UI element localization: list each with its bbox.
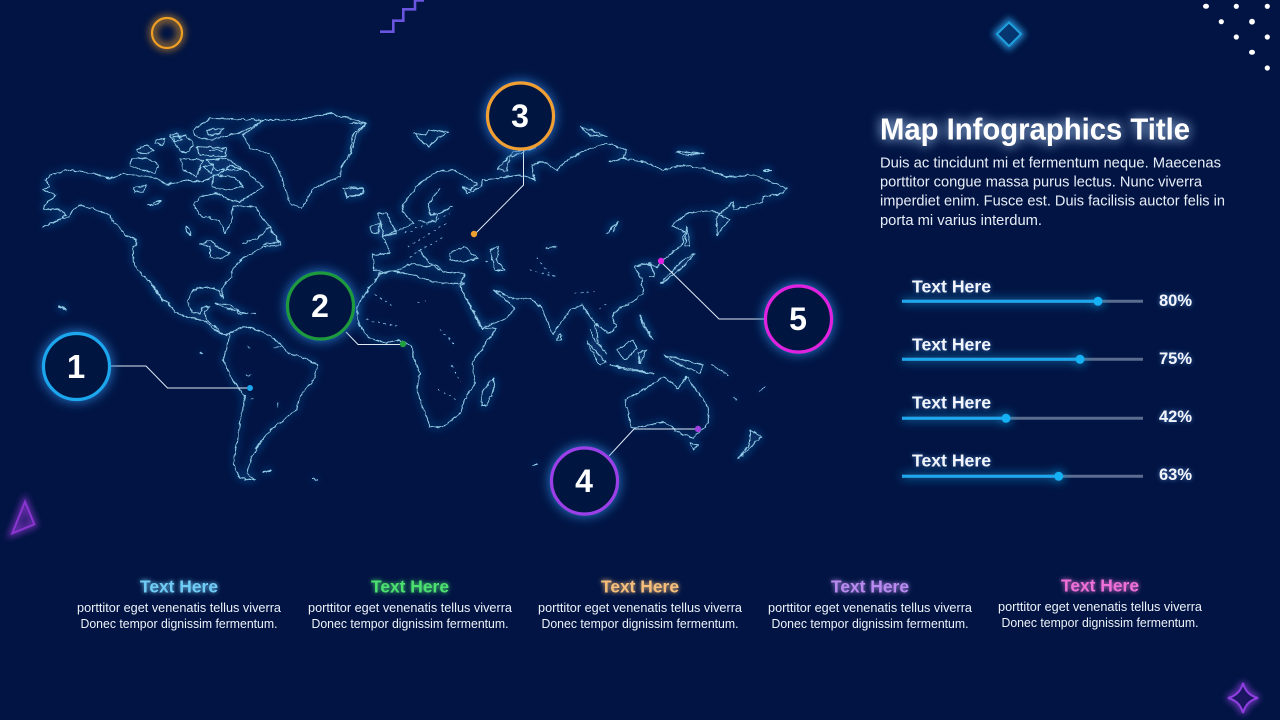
bottom column 3: Donec tempor dignissim fermentum. — [542, 617, 738, 631]
bottom column 5: Donec tempor dignissim fermentum. — [1002, 616, 1198, 630]
marker circle 1 — [44, 334, 110, 400]
progress row 4: 63%: Text Here — [912, 451, 991, 471]
bottom column 1 — [77, 577, 281, 631]
progress row 3: 42% — [902, 393, 1192, 426]
map: Africa, Eurasia and Oceania — [350, 123, 787, 465]
bottom column 2 — [308, 577, 512, 631]
marker circle 2: 2 — [311, 288, 329, 324]
callout 3: leader and marker — [471, 150, 524, 237]
marker circle 4: 4 — [575, 463, 593, 499]
progress row 2: 75% — [902, 335, 1192, 368]
progress row 1: 80%: 80% — [1159, 291, 1192, 310]
description paragraph: Duis ac tincidunt mi et fermentum neque. Maecenas — [880, 156, 1221, 172]
bottom column 2: Text Here — [371, 577, 449, 597]
progress row 1: 80%: Text Here — [912, 277, 991, 297]
marker circle 3: 3 — [511, 98, 529, 134]
bottom column 1: Text Here — [140, 577, 218, 597]
progress row 2: 75%: 75% — [1159, 349, 1192, 368]
icon: orange glowing ring — [152, 18, 182, 48]
marker circle 1: 1 — [67, 348, 85, 385]
bottom column 2: Donec tempor dignissim fermentum. — [312, 617, 508, 631]
marker circle 4 — [552, 448, 618, 514]
bottom column 1: Donec tempor dignissim fermentum. — [80, 617, 278, 631]
marker circle 3 — [488, 83, 554, 149]
bottom column 4: Donec tempor dignissim fermentum. — [772, 617, 968, 631]
description paragraph: porttitor congue massa purus lectus. Nunc viverra — [880, 174, 1203, 190]
callout 4: leader and marker — [609, 426, 701, 456]
description paragraph: imperdiet enim. Fusce est. Duis facilisis auctor felis in — [880, 194, 1225, 210]
icon: purple triangle — [12, 502, 34, 533]
bottom column 4 — [768, 577, 972, 631]
bottom column 5: porttitor eget venenatis tellus viverra — [998, 600, 1202, 614]
callout 2: leader and marker — [346, 332, 406, 347]
icon: purple stair line — [380, 0, 424, 32]
icon: purple four-point star — [1228, 683, 1258, 713]
icon: white dot pattern — [1203, 4, 1270, 71]
bottom column 5 — [998, 576, 1202, 630]
title: Map Infographics Title — [880, 112, 1190, 146]
bottom column 3: Text Here — [601, 577, 679, 597]
progress row 1: 80% — [902, 277, 1192, 310]
callout 5: leader and marker — [658, 258, 765, 319]
description paragraph — [880, 156, 1225, 229]
marker circle 2 — [288, 273, 354, 339]
progress row 3: 42%: Text Here — [912, 393, 991, 413]
progress row 3: 42%: 42% — [1159, 407, 1192, 426]
world map — [42, 113, 787, 480]
progress row 4: 63% — [902, 451, 1192, 484]
bottom column 5: Text Here — [1061, 576, 1139, 596]
progress row 2: 75%: Text Here — [912, 335, 991, 355]
bottom column 1: porttitor eget venenatis tellus viverra — [77, 601, 281, 615]
callout 1: leader and marker — [110, 366, 253, 391]
bottom column 3: porttitor eget venenatis tellus viverra — [538, 601, 742, 615]
bottom column 2: porttitor eget venenatis tellus viverra — [308, 601, 512, 615]
progress row 4: 63%: 63% — [1159, 465, 1192, 484]
bottom column 4: Text Here — [831, 577, 909, 597]
map: Americas and Greenland — [42, 113, 367, 480]
bottom column 3 — [538, 577, 742, 631]
description paragraph: porta mi varius interdum. — [880, 213, 1042, 229]
bottom column 4: porttitor eget venenatis tellus viverra — [768, 601, 972, 615]
icon: blue glowing diamond — [992, 17, 1026, 51]
marker circle 5 — [766, 286, 832, 352]
marker circle 5: 5 — [789, 301, 807, 337]
